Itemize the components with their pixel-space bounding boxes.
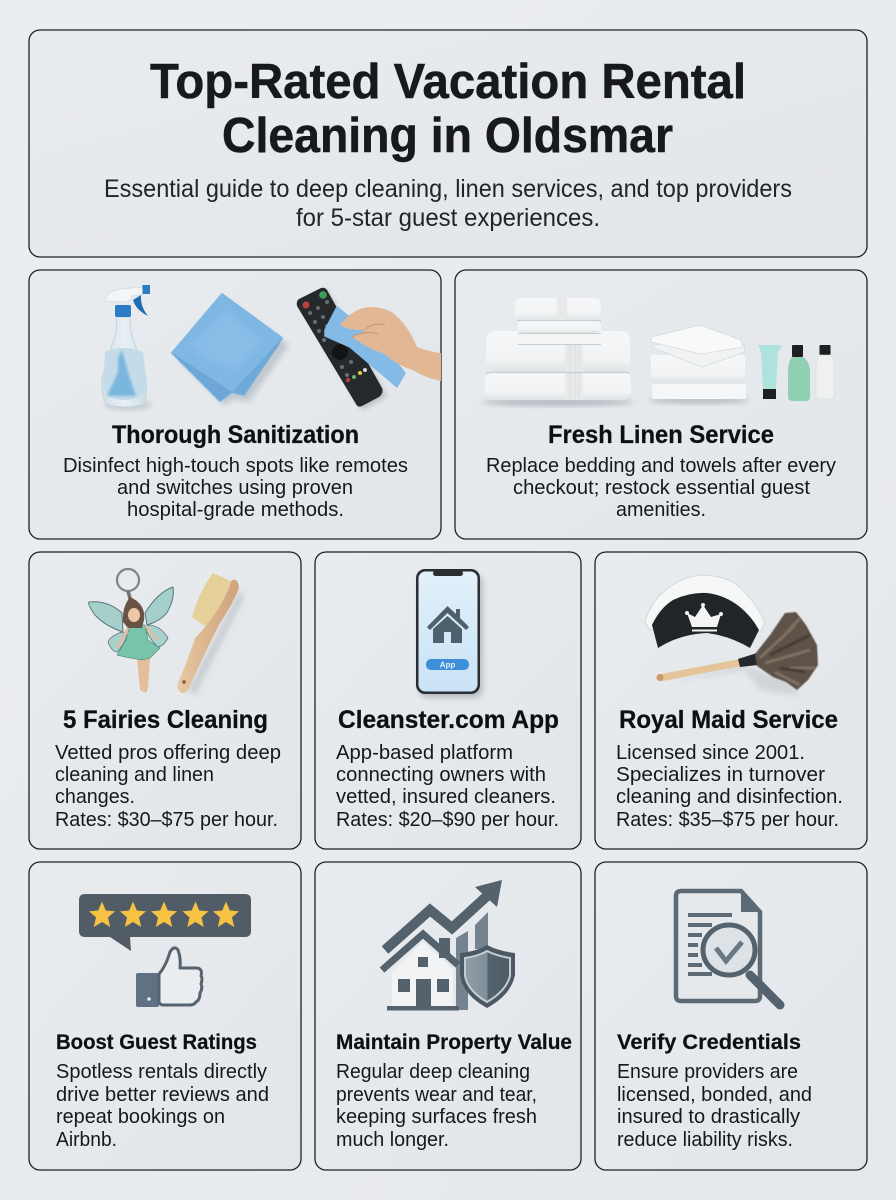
heading: 5 Fairies Cleaning: [63, 706, 268, 734]
body text: [56, 1061, 269, 1151]
title: [150, 55, 746, 163]
panel: Thorough Sanitization: [29, 270, 441, 539]
heading: Maintain Property Value: [336, 1030, 572, 1054]
body text: cleaning and linen: [55, 764, 214, 786]
heading: Boost Guest Ratings: [56, 1030, 257, 1054]
body text: insured to drastically: [617, 1106, 800, 1128]
body text: [486, 455, 836, 521]
panel: Maintain Property Value: [315, 862, 581, 1170]
panel: Boost Guest Ratings: [29, 862, 301, 1170]
icon: feather duster: [656, 612, 818, 696]
panel: Cleanster.com App: [315, 552, 581, 849]
heading: Royal Maid Service: [619, 706, 838, 734]
subtitle: for 5-star guest experiences.: [296, 204, 600, 232]
body text: Ensure providers are: [617, 1061, 798, 1083]
heading: Fresh Linen Service: [548, 421, 774, 449]
panel: Verify Credentials: [595, 862, 867, 1170]
body text: Airbnb.: [56, 1129, 117, 1151]
body text: changes.: [55, 786, 135, 808]
body text: Regular deep cleaning: [336, 1061, 530, 1083]
panel: Fresh Linen Service: [455, 270, 867, 539]
body text: reduce liability risks.: [617, 1129, 793, 1151]
icon: folded towels: [482, 298, 634, 406]
body text: Spotless rentals directly: [56, 1061, 267, 1083]
body text: and switches using proven: [117, 477, 353, 499]
icon: house with growth arrow and shield: [382, 880, 515, 1010]
icon: guest amenity bottles: [758, 345, 834, 401]
body text: connecting owners with: [336, 764, 546, 786]
body text: checkout; restock essential guest: [513, 477, 810, 499]
body text: much longer.: [336, 1129, 449, 1151]
icon: folded sheets: [649, 325, 749, 404]
body text: vetted, insured cleaners.: [336, 786, 556, 808]
body text: [617, 1061, 812, 1151]
body text: Rates: $20–$90 per hour.: [336, 809, 559, 831]
panel: header: [29, 30, 867, 257]
heading: Verify Credentials: [617, 1030, 801, 1054]
icon: document with magnifying glass: [676, 891, 780, 1005]
panel: 5 Fairies Cleaning: [29, 552, 301, 849]
icon: smartphone with house app: [416, 569, 483, 698]
body text: Vetted pros offering deep: [55, 742, 281, 764]
body text: Replace bedding and towels after every: [486, 455, 836, 477]
heading: Cleanster.com App: [338, 706, 559, 734]
body text: prevents wear and tear,: [336, 1084, 537, 1106]
icon: spray bottle: [102, 285, 152, 410]
icon: thumbs up: [136, 948, 202, 1007]
body text: drive better reviews and: [56, 1084, 269, 1106]
body text: [616, 742, 843, 831]
body text: Specializes in turnover: [616, 764, 825, 786]
title: Top-Rated Vacation Rental: [150, 55, 746, 109]
icon: maid headband with crown: [645, 575, 765, 648]
icon: smartphone with house app: App: [440, 660, 455, 670]
title: Cleaning in Oldsmar: [222, 109, 673, 163]
subtitle: Essential guide to deep cleaning, linen services, and top providers: [104, 175, 792, 203]
body text: Rates: $35–$75 per hour.: [616, 809, 839, 831]
icon: fairy keychain: [89, 569, 173, 693]
body text: [55, 742, 281, 831]
panel: Royal Maid Service: [595, 552, 867, 849]
body text: licensed, bonded, and: [617, 1084, 812, 1106]
body text: Disinfect high-touch spots like remotes: [63, 455, 408, 477]
body text: repeat bookings on: [56, 1106, 225, 1128]
subtitle: [104, 175, 792, 232]
body text: [336, 742, 559, 831]
body text: cleaning and disinfection.: [616, 786, 843, 808]
heading: Thorough Sanitization: [112, 421, 359, 449]
icon: wooden brush: [177, 573, 244, 695]
icon: remote control with hand and cloth: [297, 288, 441, 410]
icon: blue microfiber cloth: [172, 294, 289, 406]
body text: amenities.: [616, 499, 706, 521]
body text: keeping surfaces fresh: [336, 1106, 537, 1128]
icon: star rating speech bubble: [79, 894, 251, 951]
body text: Rates: $30–$75 per hour.: [55, 809, 278, 831]
body text: hospital-grade methods.: [127, 499, 344, 521]
body text: App-based platform: [336, 742, 513, 764]
body text: Licensed since 2001.: [616, 742, 805, 764]
body text: [336, 1061, 537, 1151]
body text: [63, 455, 408, 521]
